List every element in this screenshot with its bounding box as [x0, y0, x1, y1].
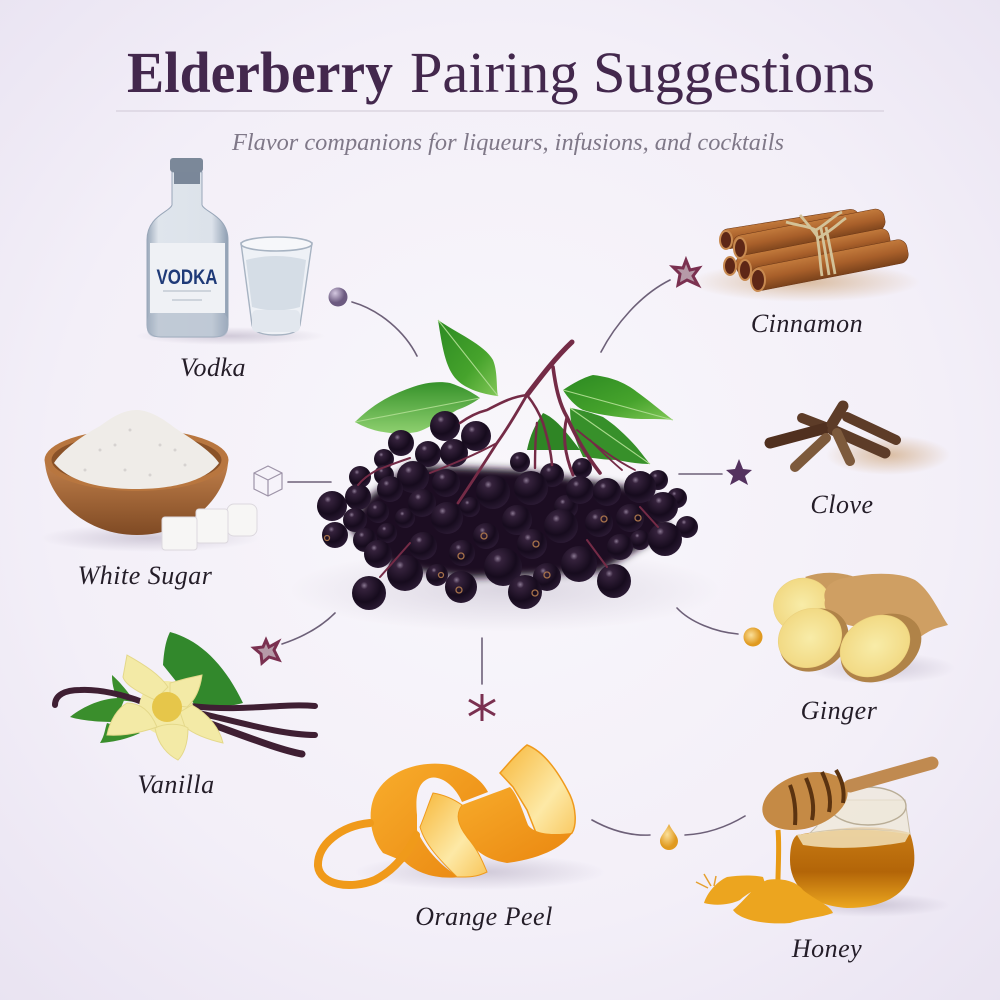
- marker: orange peel: [469, 638, 495, 721]
- item: orange peel: [318, 745, 605, 931]
- berry calyx dots: [324, 515, 641, 596]
- dark filler under berries: [350, 465, 670, 578]
- sugar crystals: [84, 428, 186, 476]
- item: honey: [696, 762, 950, 963]
- inner segment: [420, 793, 487, 877]
- label: Vanilla: [137, 770, 215, 799]
- item: cinnamon: [690, 208, 920, 338]
- icon: bowl: [45, 463, 228, 535]
- marker: vodka: [328, 288, 417, 356]
- stems: [358, 342, 658, 577]
- title: Elderberry: [127, 40, 393, 105]
- marker: cinnamon: [601, 260, 699, 352]
- icon: jar: [790, 827, 914, 908]
- marker: vanilla: [254, 613, 335, 663]
- icon: vodka bottle: VODKA: [156, 266, 218, 289]
- icon: vodka bottle: [147, 158, 228, 337]
- title: [127, 40, 875, 105]
- label: White Sugar: [78, 561, 213, 590]
- icon: honey dipper: [850, 763, 932, 786]
- label: Vodka: [180, 353, 246, 382]
- item: ginger: [766, 570, 955, 725]
- subtitle: Flavor companions for liqueurs, infusions, and cocktails: [231, 130, 784, 156]
- honey drip: [775, 830, 781, 900]
- marker: sugar cube: [254, 466, 331, 496]
- title: Pairing Suggestions: [410, 40, 875, 105]
- item: vodka: [135, 158, 325, 382]
- label: Orange Peel: [415, 902, 553, 931]
- marker: ginger: [677, 608, 762, 646]
- label: Cinnamon: [751, 309, 863, 338]
- item: clove: [770, 406, 950, 519]
- marker: honey: [592, 816, 745, 850]
- marker: clove: [679, 459, 752, 485]
- connector arcs and markers: [254, 260, 762, 850]
- label: Clove: [810, 490, 874, 519]
- icon: shot glass: [241, 237, 312, 335]
- main loop: [371, 764, 488, 878]
- ring: [318, 823, 416, 885]
- berries: [317, 411, 698, 610]
- big right peel: [443, 787, 572, 863]
- upper-right shell: [500, 745, 575, 844]
- item: white sugar: [40, 410, 260, 590]
- label: Honey: [791, 934, 862, 963]
- label: Ginger: [801, 696, 878, 725]
- item: vanilla: [55, 632, 315, 799]
- icon: sugar cubes: [162, 504, 257, 550]
- central elderberry cluster: [290, 320, 720, 632]
- leaves: [355, 320, 673, 464]
